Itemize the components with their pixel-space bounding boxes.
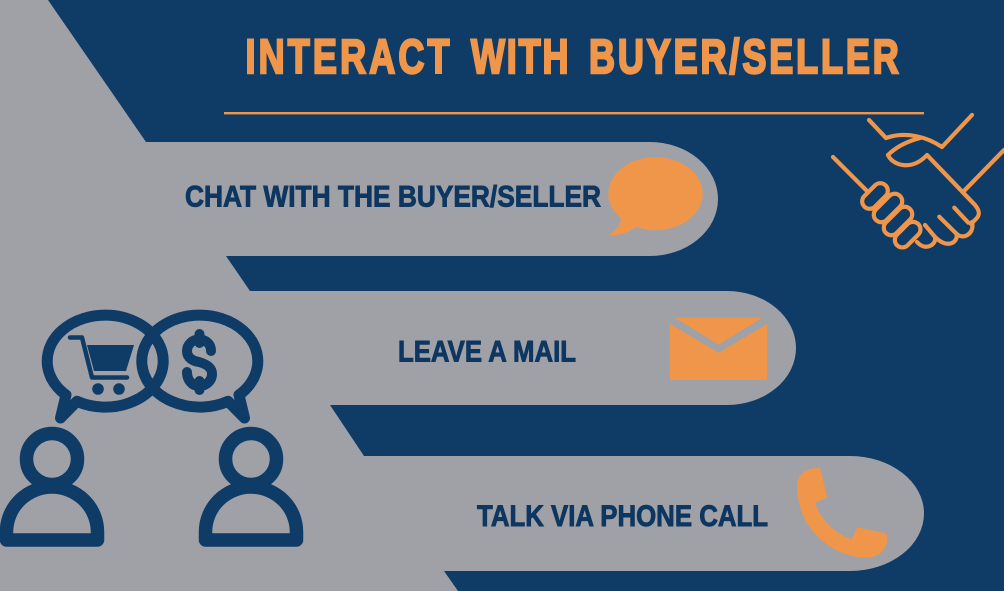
icon: buyer and seller conversation	[6, 315, 296, 540]
panel: phone row label: TALK VIA PHONE CALL	[477, 500, 768, 533]
icon: handshake	[833, 115, 1004, 251]
icon: cart speech bubble	[47, 315, 163, 418]
icon: buyer person	[6, 434, 98, 540]
icon: speech bubble	[608, 157, 703, 235]
panel: chat row label: CHAT WITH THE BUYER/SELLER	[185, 180, 601, 214]
panel: mail row label: LEAVE A MAIL	[398, 336, 576, 368]
title underline	[224, 112, 924, 114]
title: WITH	[471, 30, 569, 83]
icon: telephone handset	[797, 468, 887, 558]
icon: envelope	[670, 318, 767, 380]
icon: shopping cart	[70, 338, 134, 395]
icon: dollar sign	[187, 334, 212, 390]
title	[246, 30, 899, 83]
title: BUYER/SELLER	[589, 30, 899, 83]
title: INTERACT	[246, 30, 450, 83]
icon: seller person	[206, 434, 296, 540]
icon: dollar speech bubble	[142, 315, 258, 418]
